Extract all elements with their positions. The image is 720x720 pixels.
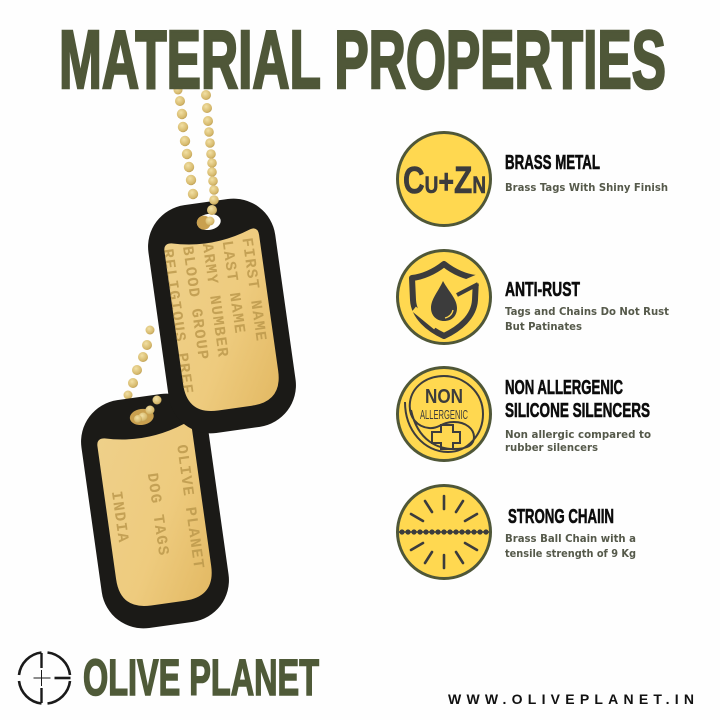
dog tag: lower [81, 394, 229, 628]
panel: non allergenic [398, 368, 651, 460]
icon: Cu+Zn: CU+ZN [403, 160, 486, 202]
heading: non allergenic silicone silencers: NON ALLERGENIC [505, 377, 623, 399]
dog tag: upper [148, 198, 296, 434]
text: anti-rust description: Tags and Chains Do Not Rust [505, 305, 669, 318]
dog tag: upper: LAST NAME [218, 239, 249, 335]
text: anti-rust description [505, 305, 669, 333]
logo wordmark: OLIVE PLANET [83, 649, 319, 706]
logo: crosshair [19, 652, 70, 704]
text: brass description: Brass Tags With Shiny Finish [505, 181, 668, 194]
text: strong chain description: tensile strength of 9 Kg [505, 547, 636, 560]
icon: ball chain with rays [398, 486, 490, 578]
icon: shield with water drop [398, 250, 490, 344]
panel: strong chain [398, 486, 636, 578]
heading: non allergenic silicone silencers [505, 377, 650, 422]
text: strong chain description: Brass Ball Chain with a [505, 532, 636, 545]
dog tag: lower: INDIA [107, 490, 132, 545]
text: non allergenic description: Non allergic compared to [505, 428, 651, 441]
dog tag: lower: OLIVE PLANET [172, 443, 207, 571]
website url: WWW.OLIVEPLANET.IN [448, 691, 694, 707]
chain: lower tag ring [134, 396, 162, 423]
dog tag: lower: DOG TAGS [143, 472, 172, 558]
icon: Cu+Zn [398, 132, 490, 226]
icon: non allergenic: ALLERGENIC [420, 407, 468, 422]
text: non allergenic description: rubber silencers [505, 441, 598, 454]
heading: brass metal: BRASS METAL [505, 152, 600, 174]
heading: anti-rust: ANTI-RUST [505, 279, 580, 301]
chain: upper tag ring [206, 195, 219, 226]
heading: strong chain: STRONG CHAIIN [508, 506, 614, 528]
chain: rear ball chain between tags [124, 326, 154, 400]
dog tag: upper: RELIGIOUS PREF [158, 248, 197, 396]
text: non allergenic description [505, 428, 651, 454]
dog tag: upper: ARMY NUMBER [198, 242, 232, 359]
icon: non allergenic: NON [425, 386, 463, 408]
text: strong chain description [505, 532, 636, 560]
icon: non allergenic [398, 368, 490, 460]
panel: anti-rust [398, 250, 669, 344]
chain: upper ball chains [174, 86, 219, 199]
dog tag: upper: FIRST NAME [237, 237, 270, 343]
panel: brass metal [398, 132, 668, 226]
heading: non allergenic silicone silencers: SILICONE SILENCERS [505, 400, 650, 422]
text: anti-rust description: But Patinates [505, 320, 582, 333]
dog tag: upper: BLOOD GROUP [178, 245, 212, 362]
